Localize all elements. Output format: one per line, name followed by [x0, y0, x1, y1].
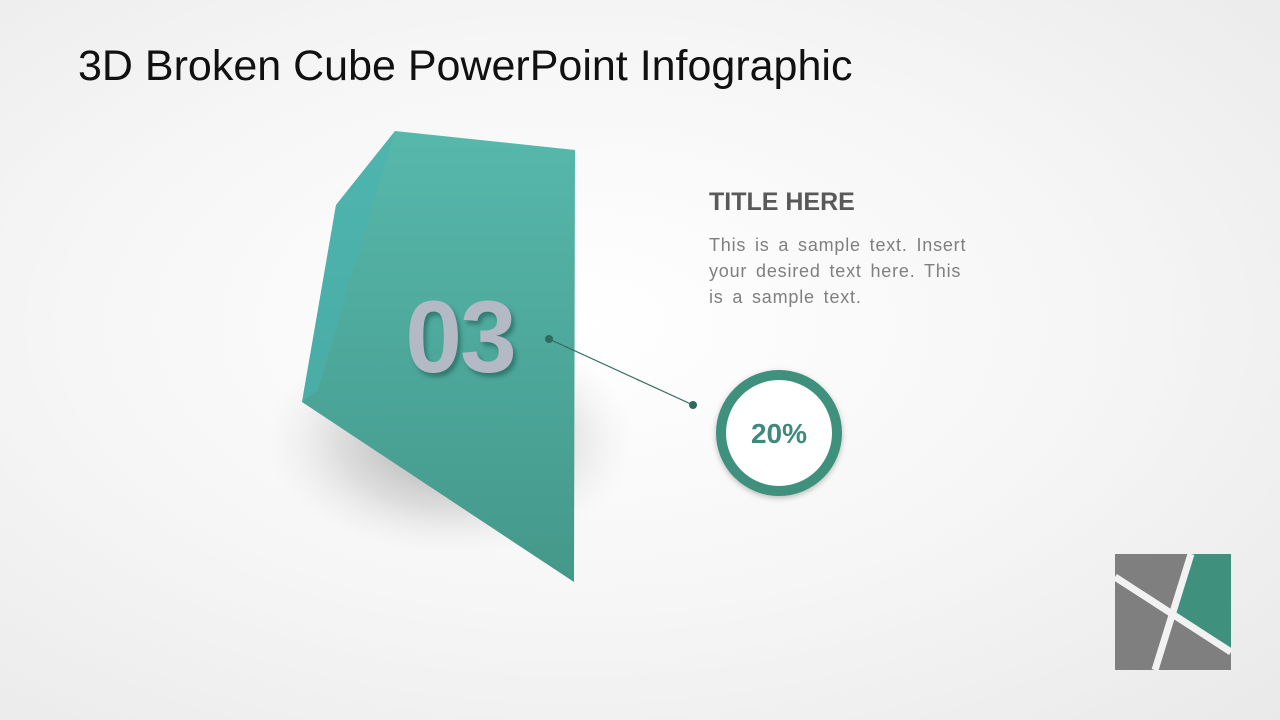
body text: is a sample text. [709, 287, 862, 307]
percentage ring [721, 375, 837, 491]
body text [709, 235, 966, 307]
text block [709, 188, 966, 307]
number 03: 03 [405, 280, 515, 394]
heading: TITLE HERE [709, 188, 855, 216]
percentage ring: 20% [751, 418, 807, 449]
cube face [302, 131, 575, 582]
connector line [545, 335, 697, 409]
title: 3D Broken Cube PowerPoint Infographic [78, 42, 852, 90]
body text: This is a sample text. Insert [709, 235, 966, 255]
body text: your desired text here. This [709, 261, 961, 281]
shadow [265, 325, 635, 555]
logo icon [1115, 554, 1231, 670]
